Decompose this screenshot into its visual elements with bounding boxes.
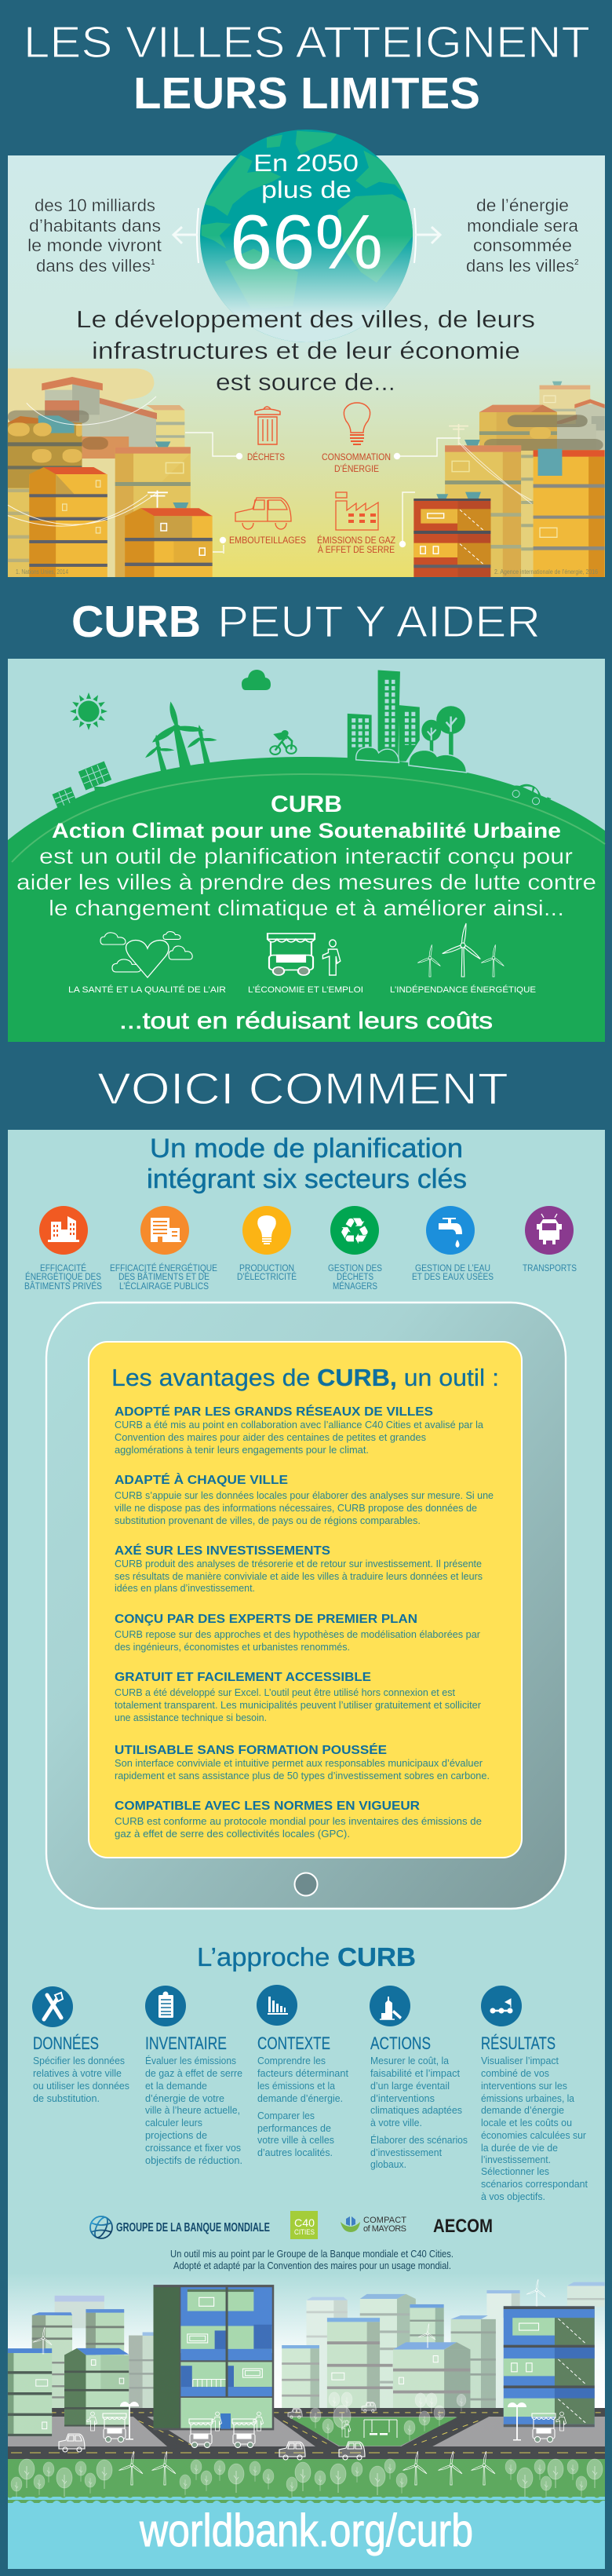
benefit: investment focus: AXÉ SUR LES INVESTISSEMENTS [115, 1543, 330, 1558]
column: actions: climatiques adaptées [370, 2104, 462, 2116]
title: LEURS LIMITES [133, 68, 480, 119]
right tower [504, 2306, 595, 2427]
label: water: GESTION DE L’EAU [415, 1264, 490, 1273]
benefit: free and accessible [115, 1671, 481, 1723]
icon: route to flag [481, 1986, 522, 2026]
benefit: usable without training: UTILISABLE SANS FORMATION POUSSÉE [115, 1742, 387, 1757]
heading: development [76, 305, 535, 396]
benefit: investment focus: idées en plans d’investissement. [115, 1583, 255, 1594]
icon: wind turbines [145, 702, 217, 773]
benefit: expert design [115, 1613, 480, 1653]
label: waste: DÉCHETS [247, 452, 285, 462]
heading: six sectors: Un mode de planification [150, 1134, 463, 1164]
heading: CURB description: CURB [271, 791, 342, 817]
benefit: adapted to each city: ADAPTÉ À CHAQUE VILLE [115, 1472, 288, 1487]
column: actions: globaux. [370, 2158, 406, 2170]
heading: six sectors: intégrant six secteurs clés [147, 1164, 467, 1194]
logo: C40 Cities: C40 [294, 2216, 315, 2229]
column: inventory [145, 1986, 242, 2166]
column: inventory: objectifs de réduction. [145, 2154, 242, 2166]
icon: electric car [508, 779, 553, 809]
column: results: l’investissement. [481, 2154, 551, 2165]
column: actions: d’un large éventail [370, 2080, 450, 2092]
column: inventory: croissance et fixer vos [145, 2142, 241, 2154]
column: results: locale et les coûts ou [481, 2117, 572, 2128]
benefit: standards compatible: CURB est conforme au protocole mondial pour les inventaires des émissions de [115, 1816, 482, 1827]
column: results: scénarios correspondant [481, 2178, 588, 2190]
text: left: le monde vivront [27, 236, 162, 255]
background towers [32, 2282, 605, 2410]
label: public buildings: DES BÂTIMENTS ET DE [118, 1272, 209, 1282]
label: energy independence: L’INDÉPENDANCE ÉNERGÉTIQUE [390, 985, 536, 995]
column: context: demande d’énergie. [257, 2092, 343, 2104]
url: worldbank.org/curb [139, 2505, 473, 2556]
icon: private buildings [39, 1206, 88, 1255]
icon: cloud [242, 670, 271, 690]
label: private buildings: EFFICACITÉ [40, 1263, 86, 1273]
logo: Compact of Mayors [341, 2216, 406, 2234]
title: LES VILLES ATTEIGNENT [24, 17, 590, 68]
icon: city skyline with trees [348, 670, 467, 773]
text: left: d’habitants dans [29, 216, 161, 236]
credit text: Un outil mis au point par le Groupe de la Banque mondiale et C40 Cities. [170, 2249, 454, 2260]
green hill [8, 757, 605, 1042]
tablet screen: CURB benefits [89, 1342, 522, 1858]
benefit: adopted by networks: CURB a été mis au point en collaboration avec l’alliance C40 Cities et avalisé par la [115, 1420, 483, 1431]
front road [8, 2446, 605, 2459]
heading: CURB can help: PEUT Y AIDER [217, 597, 541, 647]
heading: benefits: Les avantages de CURB, un outil : [111, 1364, 499, 1391]
label: public buildings: EFFICACITÉ ÉNERGÉTIQUE [110, 1263, 217, 1273]
label: energy consumption: CONSOMMATION [322, 453, 391, 462]
icon: trash can [255, 407, 280, 444]
column: results: à vos objectifs. [481, 2191, 545, 2202]
icon: clipboard [145, 1986, 186, 2026]
tablet frame [46, 1303, 566, 1909]
panel: cities reaching limits [8, 130, 605, 577]
icon: recycling: ♻ [338, 1210, 371, 1252]
benefit: adapted to each city: CURB s’appuie sur les données locales pour élaborer des analyses sur mesure. Si une [115, 1490, 494, 1501]
label: health and air quality: LA SANTÉ ET LA QUALITÉ DE L’AIR [68, 985, 226, 995]
benefit: adapted to each city: ville ne dispose pas des informations nécessaires, CURB propose des données de [115, 1503, 477, 1514]
benefit: usable without training: Son interface conviviale et intuitive permet aux responsables municipaux d’évaluer [115, 1758, 483, 1769]
heading: development: Le développement des villes, de leurs [76, 305, 535, 333]
column: results: la durée de vie de [481, 2142, 558, 2154]
front buildings left [8, 2348, 129, 2436]
text: right: consommée [473, 236, 572, 255]
road behind [8, 2408, 605, 2417]
benefit: standards compatible: COMPATIBLE AVEC LES NORMES EN VIGUEUR [115, 1800, 420, 1813]
label: greenhouse gas emissions [317, 535, 395, 555]
icon: bus [525, 1206, 574, 1255]
heading: CURB description: est un outil de planification interactif conçu pour [39, 844, 573, 868]
column: data: relatives à votre ville [33, 2067, 122, 2079]
road network [51, 2413, 605, 2447]
benefit: free and accessible: CURB a été développé sur Excel. L’outil peut être utilisé hors connexion et est [115, 1687, 456, 1698]
icon: public buildings [140, 1206, 189, 1255]
column: inventory: ville à l’heure actuelle, [145, 2104, 240, 2116]
illustration: green city [8, 2273, 605, 2569]
icon: city and tools [370, 1986, 410, 2026]
column: actions: d’investissement [370, 2147, 442, 2158]
label: public buildings: L’ÉCLAIRAGE PUBLICS [119, 1281, 209, 1292]
column: context: CONTEXTE [257, 2033, 330, 2053]
icon: electricity [242, 1206, 291, 1255]
headline: 66%: 66% [230, 199, 383, 285]
text: right: mondiale sera [467, 216, 579, 236]
benefit: adopted by networks [115, 1404, 483, 1456]
text: right: de l’énergie [476, 195, 569, 215]
heading: development: infrastructures et de leur économie [92, 337, 520, 364]
heading: six sectors [147, 1134, 467, 1194]
label: private buildings: ÉNERGÉTIQUE DES [25, 1272, 101, 1282]
benefit: usable without training [115, 1742, 490, 1781]
benefit: adopted by networks: ADOPTÉ PAR LES GRANDS RÉSEAUX DE VILLES [115, 1404, 433, 1419]
heading: CURB description: Action Climat pour une Soutenabilité Urbaine [52, 819, 561, 842]
column: inventory: et la demande [145, 2080, 207, 2092]
heading: CURB description: le changement climatique et à améliorer ainsi... [49, 896, 564, 920]
arrow: right [415, 227, 440, 243]
logo: C40 Cities: CITIES [294, 2228, 315, 2236]
column: context: votre ville à celles [257, 2134, 334, 2146]
column: results: combiné de vos [481, 2067, 549, 2079]
column: context: Comparer les [257, 2110, 315, 2121]
logo: Compact of Mayors: COMPACT [363, 2216, 406, 2225]
footnote 2: 2. Agence internationale de l’énergie, 2016 [494, 568, 598, 575]
footnote 1: 1. Nations Unies, 2014 [16, 568, 68, 575]
central tower [154, 2285, 274, 2430]
text: left: des 10 milliards [35, 195, 155, 215]
column: inventory: projections de [145, 2129, 207, 2141]
text: reducing costs: ...tout en réduisant leurs coûts [119, 1008, 493, 1034]
icon: car [235, 498, 291, 529]
column: results: émissions urbaines, la [481, 2092, 575, 2104]
illustration: left city buildings [8, 368, 213, 577]
headline: 66%: En 2050 [253, 149, 359, 177]
column: context: Comprendre les [257, 2055, 326, 2066]
label: waste: GESTION DES [328, 1264, 382, 1273]
benefit: free and accessible: une assistance technique si besoin. [115, 1712, 267, 1723]
column: context [257, 1985, 348, 2158]
headline: 66%: plus de [261, 176, 352, 203]
label: electricity: D’ÉLECTRICITÉ [237, 1272, 297, 1282]
text: right: 2 [574, 258, 579, 267]
icon: cyclist [270, 730, 297, 755]
illustration: right city buildings [413, 382, 605, 577]
globe [188, 130, 424, 345]
icon: bar chart [257, 1985, 297, 2026]
text: left [27, 195, 162, 276]
heading: CURB can help [71, 597, 541, 647]
label: private buildings [24, 1263, 102, 1292]
column: results: Visualiser l’impact [481, 2055, 559, 2066]
column: actions: Mesurer le coût, la [370, 2055, 450, 2066]
icon: turbines [417, 923, 505, 977]
connector lines [185, 433, 461, 554]
benefit: expert design: CURB repose sur des approches et des hypothèses de modélisation élaborées par [115, 1629, 480, 1640]
river [8, 2497, 605, 2569]
icon: heart and clouds [100, 932, 192, 977]
column: results: Sélectionner les [481, 2165, 549, 2177]
credit text: Adopté et adapté par la Convention des maires pour un usage mondial. [173, 2260, 451, 2271]
column: actions: d’interventions [370, 2092, 435, 2104]
sidewalk [8, 2417, 605, 2446]
benefit: investment focus [115, 1543, 483, 1594]
text: left: dans des villes [36, 256, 151, 276]
column: inventory: INVENTAIRE [145, 2033, 227, 2053]
column: context: performances de [257, 2122, 331, 2134]
logo: C40 Cities [290, 2211, 318, 2239]
column: context: d’autres localités. [257, 2147, 333, 2158]
benefit: expert design: des ingénieurs, économistes et urbanistes renommés. [115, 1642, 350, 1653]
label: waste: MÉNAGERS [333, 1281, 377, 1292]
park trees [310, 2392, 466, 2441]
text: right [466, 195, 579, 276]
heading: CURB description [16, 791, 596, 920]
panel: how CURB works [8, 1130, 605, 2569]
column: inventory: calculer leurs [145, 2117, 202, 2128]
label: electricity [237, 1264, 297, 1282]
column: inventory: Évaluer les émissions [145, 2055, 236, 2066]
column: data: ou utiliser les données [33, 2080, 129, 2092]
street details: lamps, carts and cars [59, 2402, 566, 2460]
benefit: adopted by networks: agglomérations à tenir leurs engagements pour le climat. [115, 1445, 369, 1456]
logo: World Bank Group: GROUPE DE LA BANQUE MONDIALE [116, 2221, 270, 2234]
benefit: standards compatible: gaz à effet de serre des collectivités locales (GPC). [115, 1829, 350, 1840]
benefit: free and accessible: totalement transparent. Les municipalités peuvent l’utiliser gratuitement et solliciter [115, 1700, 481, 1711]
text: left: 1 [151, 258, 155, 267]
label: water: ET DES EAUX USÉES [412, 1272, 494, 1282]
headline: 66% [230, 149, 383, 285]
heading: CURB description: aider les villes à prendre des mesures de lutte contre [16, 870, 596, 894]
benefit: standards compatible [115, 1800, 482, 1840]
label: electricity: PRODUCTION [239, 1264, 294, 1273]
icon: water tap [426, 1206, 475, 1255]
panel: CURB [8, 659, 605, 1042]
icon: tools [32, 1986, 73, 2027]
column: actions: Élaborer des scénarios [370, 2134, 468, 2146]
home button [295, 1873, 317, 1895]
benefit: investment focus: ses résultats de manière conviviale et aide les villes à traduire leurs données et leurs [115, 1571, 483, 1582]
column: actions [370, 1986, 468, 2170]
column: results: interventions sur les [481, 2080, 567, 2092]
logo: Compact of Mayors: of MAYORS [363, 2224, 406, 2234]
label: greenhouse gas emissions: À EFFET DE SERRE [318, 545, 395, 555]
benefit: adapted to each city: substitution provenant de villes, de pays ou de régions comparables. [115, 1515, 421, 1526]
label: economy and jobs: L’ÉCONOMIE ET L’EMPLOI [248, 985, 363, 995]
column: results: économies calculées sur [481, 2129, 587, 2141]
icon: factory [336, 492, 378, 530]
wind turbines along the river [33, 2279, 546, 2485]
icon: recycling [330, 1206, 379, 1255]
heading: CURB can help: CURB [71, 597, 201, 647]
icon: solar panels [53, 762, 111, 812]
label: greenhouse gas emissions: ÉMISSIONS DE GAZ [317, 535, 395, 546]
label: water [412, 1264, 494, 1282]
credit text [170, 2249, 454, 2271]
label: public buildings [110, 1263, 217, 1292]
column: inventory: d’énergie de votre [145, 2092, 224, 2104]
heading: CURB approach: L’approche CURB [197, 1942, 416, 1971]
label: energy consumption [322, 453, 391, 474]
icon: light bulb [344, 403, 370, 444]
label: private buildings: BÂTIMENTS PRIVÉS [24, 1281, 102, 1292]
label: transport: TRANSPORTS [523, 1264, 577, 1273]
label: traffic jams: EMBOUTEILLAGES [229, 536, 306, 546]
column: results [481, 1986, 588, 2202]
column: data: de substitution. [33, 2092, 100, 2104]
heading: here is how: VOICI COMMENT [97, 1064, 508, 1114]
icon: market cart and vendor [268, 934, 341, 975]
logo: World Bank Group [90, 2216, 270, 2239]
benefit: expert design: CONÇU PAR DES EXPERTS DE PREMIER PLAN [115, 1613, 417, 1626]
title [24, 17, 590, 119]
label: energy consumption: D’ÉNERGIE [334, 464, 379, 474]
column: inventory: de gaz à effet de serre [145, 2067, 242, 2079]
column: context: facteurs déterminant [257, 2067, 348, 2079]
column: results: demande d’énergie [481, 2104, 564, 2116]
column: actions: ACTIONS [370, 2033, 431, 2053]
grass [8, 2459, 605, 2498]
column: results: RÉSULTATS [481, 2033, 556, 2053]
column: actions: faisabilité et l’impact [370, 2067, 460, 2079]
riverside trees [11, 2459, 603, 2497]
column: data [32, 1986, 129, 2104]
column: data: Spécifier les données [33, 2055, 125, 2066]
column: data: DONNÉES [33, 2033, 99, 2053]
benefit: adapted to each city [115, 1472, 494, 1526]
icon: sun [70, 692, 107, 730]
benefit: adopted by networks: Convention des maires pour aider des centaines de petites et grandes [115, 1432, 426, 1443]
heading: development: est source de... [216, 368, 395, 396]
benefit: free and accessible: GRATUIT ET FACILEMENT ACCESSIBLE [115, 1671, 371, 1684]
logo: AECOM: AECOM [433, 2216, 493, 2237]
label: waste [328, 1264, 382, 1292]
column: context: les émissions et la [257, 2080, 336, 2092]
arrow: left [173, 227, 198, 243]
label: waste: DÉCHETS [337, 1272, 373, 1282]
benefit: investment focus: CURB produit des analyses de trésorerie et de retour sur investissement. Il présente [115, 1558, 482, 1569]
text: right: dans les villes [466, 256, 574, 276]
benefit: usable without training: rapidement et sans assistance plus de 50 types d’investissement sobres en carbone. [115, 1770, 490, 1781]
column: actions: à votre ville. [370, 2117, 422, 2128]
